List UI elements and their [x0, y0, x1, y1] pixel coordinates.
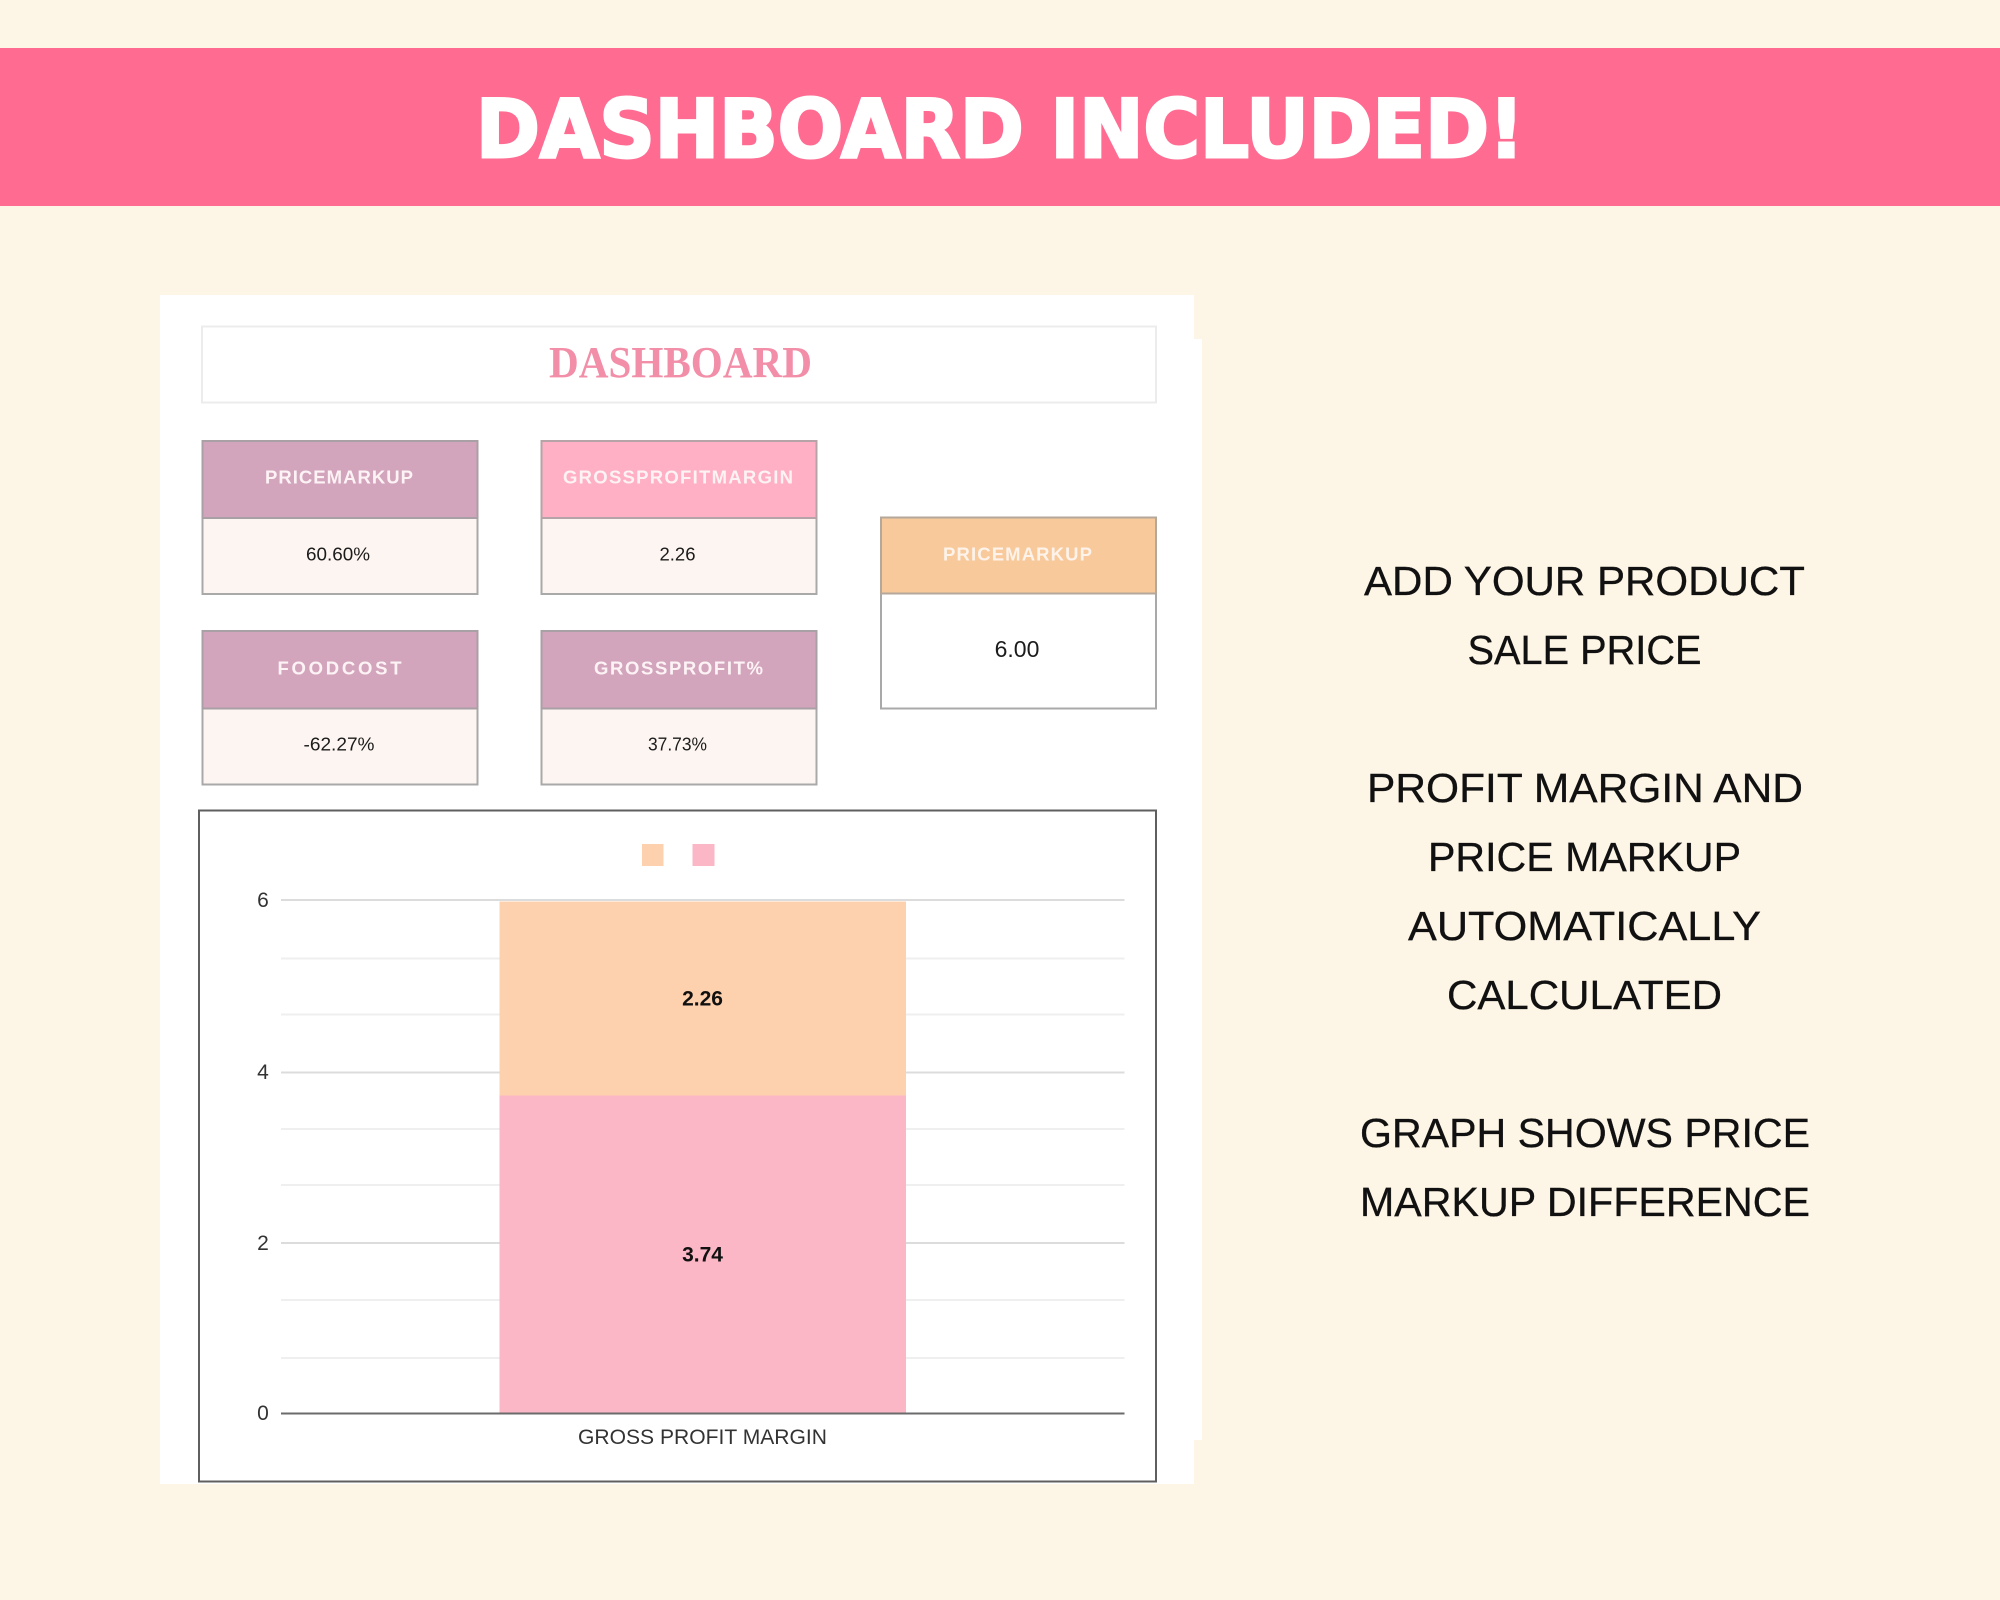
card: price markup percent: [202, 441, 478, 594]
chart panel: [199, 810, 1156, 1482]
note: graph: MARKUP DIFFERENCE: [1360, 1179, 1810, 1225]
heading: dashboard included: DASHBOARD INCLUDED!: [476, 83, 1524, 176]
chart axis baseline: [281, 1412, 1124, 1414]
note: sale price: ADD YOUR PRODUCT: [1364, 558, 1805, 604]
card: gross profit margin: 2.26: [659, 544, 696, 564]
y axis labels: 4: [257, 1061, 269, 1084]
note: automatic calculation: AUTOMATICALLY: [1408, 903, 1761, 949]
y axis labels: 6: [257, 889, 269, 912]
card: gross profit percent: [542, 631, 816, 784]
stacked bar: [500, 902, 906, 1414]
y axis labels: 2: [257, 1232, 269, 1255]
card: food cost: [202, 631, 478, 784]
note: sale price: [1364, 558, 1805, 673]
card: food cost: FOODCOST: [278, 658, 402, 678]
card: gross profit margin: [542, 441, 816, 594]
card: price markup value: 6.00: [995, 636, 1039, 662]
x axis label: GROSS PROFIT MARGIN: [578, 1426, 827, 1449]
dashboard title box: [202, 326, 1156, 402]
chart grid lines: [281, 900, 1124, 1358]
note: automatic calculation: PROFIT MARGIN AND: [1367, 765, 1803, 811]
card: price markup value: PRICEMARKUP: [943, 544, 1092, 564]
note: graph: GRAPH SHOWS PRICE: [1360, 1110, 1810, 1156]
card: gross profit percent: GROSSPROFIT%: [594, 658, 763, 678]
note: automatic calculation: PRICE MARKUP: [1428, 834, 1741, 880]
card: food cost: -62.27%: [304, 734, 374, 754]
y axis labels: [257, 889, 269, 1425]
card: gross profit percent: 37.73%: [648, 734, 707, 754]
stacked bar: 3.74: [682, 1244, 723, 1266]
dashboard title box: DASHBOARD: [549, 338, 812, 387]
card: gross profit margin: GROSSPROFITMARGIN: [563, 466, 793, 488]
panel: dashboard sheet: [160, 295, 1202, 1484]
note: graph: [1360, 1110, 1810, 1225]
stacked bar: 2.26: [682, 988, 723, 1010]
note: sale price: SALE PRICE: [1468, 627, 1702, 673]
note: automatic calculation: [1367, 765, 1803, 1018]
text block: feature notes: [1360, 558, 1810, 1225]
card: price markup value: [881, 518, 1156, 708]
banner: [0, 48, 2000, 206]
card: price markup percent: PRICEMARKUP: [265, 466, 413, 488]
y axis labels: 0: [257, 1402, 269, 1425]
chart legend: [642, 844, 714, 866]
card: price markup percent: 60.60%: [306, 544, 370, 564]
note: automatic calculation: CALCULATED: [1447, 972, 1722, 1018]
